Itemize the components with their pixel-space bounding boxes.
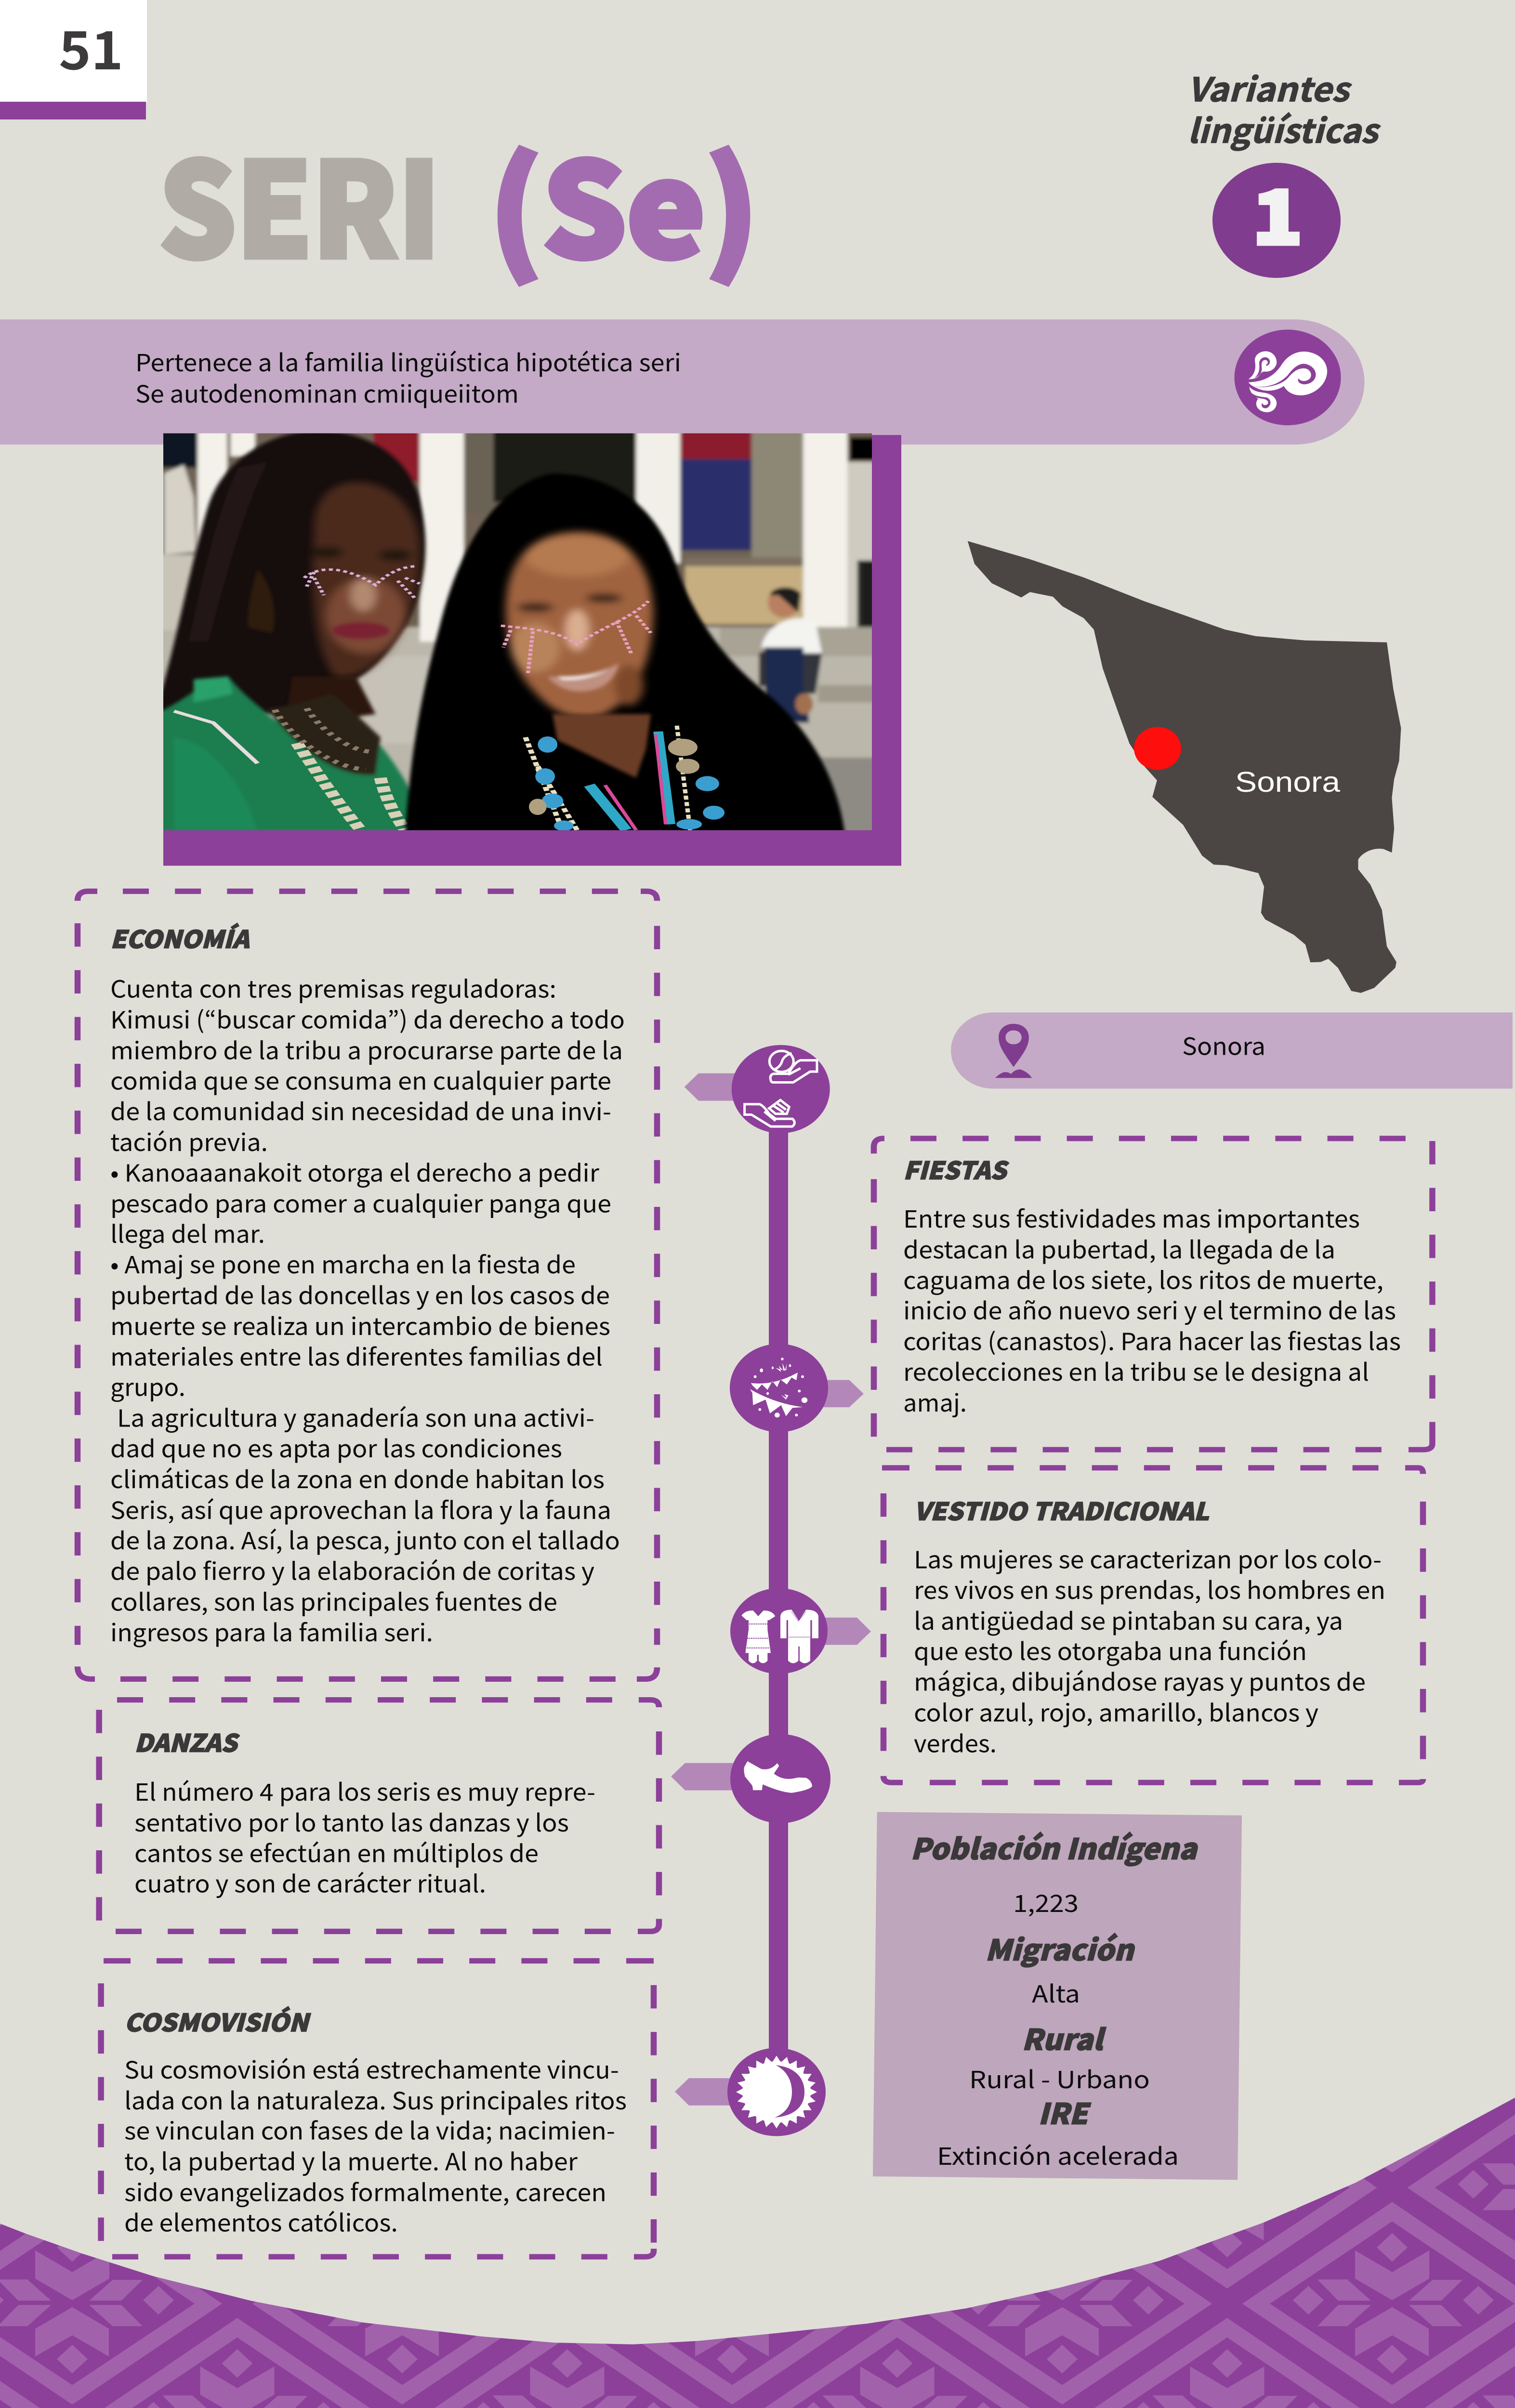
text: economía: tación previa.	[110, 1124, 268, 1158]
panel: vestido tradicional	[882, 1468, 1423, 1782]
text: cosmovisión: to, la pubertad y la muerte. Al no haber	[124, 2143, 578, 2178]
heading: fiestas: FIESTAS	[903, 1152, 1009, 1186]
language family band	[0, 319, 1365, 445]
stat: población indígena: 1,223	[1013, 1885, 1079, 1919]
text: economía: llega del mar.	[110, 1216, 265, 1250]
heading: economía: ECONOMÍA	[110, 920, 250, 955]
map marker	[1134, 727, 1181, 770]
language family band: Pertenece a la familia lingüística hipotética seri	[135, 344, 681, 379]
text: danzas: cantos se efectúan en múltiplos de	[134, 1835, 539, 1870]
stat: ire: IRE	[1038, 2091, 1091, 2133]
text: fiestas: recolecciones en la tribu se le designa al	[903, 1353, 1369, 1388]
stat: población indígena	[910, 1826, 1199, 1919]
icon: dance shoe	[730, 1734, 830, 1823]
icon: sun and moon	[727, 2044, 830, 2136]
text: economía: Cuenta con tres premisas reguladoras:	[110, 970, 556, 1005]
text: economía: de la comunidad sin necesidad de una invi-	[110, 1093, 611, 1127]
stat: rural: Rural - Urbano	[969, 2061, 1150, 2095]
text: fiestas: coritas (canastos). Para hacer las fiestas las	[903, 1323, 1401, 1357]
variantes lingüísticas heading: lingüísticas	[1187, 105, 1381, 152]
text: cosmovisión: de elementos católicos.	[124, 2204, 398, 2238]
text: fiestas: caguama de los siete, los ritos de muerte,	[903, 1262, 1383, 1296]
stat: población indígena: Población Indígena	[910, 1826, 1199, 1868]
icon: festive bunting	[730, 1344, 828, 1432]
text: economía: • Amaj se pone en marcha en la fiesta de	[110, 1246, 576, 1281]
text: cosmovisión: lada con la naturaleza. Sus principales ritos	[124, 2082, 627, 2117]
variantes count circle	[1212, 158, 1341, 278]
text: economía: pescado para comer a cualquier panga que	[110, 1185, 611, 1220]
stat: ire	[937, 2091, 1179, 2172]
text: cosmovisión	[124, 2051, 627, 2238]
photo frame	[163, 435, 901, 866]
map: Sonora	[968, 541, 1401, 993]
text: economía: pubertad de las doncellas y en los casos de	[110, 1277, 610, 1311]
panel: statistics	[873, 1812, 1242, 2180]
text: cosmovisión: sido evangelizados formalmente, carecen	[124, 2174, 606, 2209]
text: fiestas: amaj.	[903, 1384, 967, 1419]
text: danzas: cuatro y son de carácter ritual.	[134, 1865, 486, 1900]
variantes count circle: 1	[1252, 158, 1303, 266]
text: economía: miembro de la tribu a procurarse parte de la	[110, 1032, 623, 1066]
stat: ire: Extinción acelerada	[937, 2137, 1179, 2172]
panel: danzas	[99, 1700, 659, 1931]
arrow: economía	[685, 1073, 742, 1101]
title: SERI	[159, 107, 440, 295]
map: Sonora: Sonora	[1235, 766, 1340, 798]
text: vestido tradicional: color azul, rojo, amarillo, blancos y	[914, 1694, 1318, 1729]
text: economía	[110, 970, 625, 1649]
icon: wind swirl	[1234, 329, 1341, 425]
arrow: cosmovisión	[675, 2078, 737, 2106]
text: vestido tradicional: res vivos en sus prendas, los hombres en	[914, 1571, 1385, 1606]
text: vestido tradicional: la antigüedad se pintaban su cara, ya	[914, 1602, 1343, 1637]
page number tab: 51	[59, 8, 123, 85]
stat: rural: Rural	[1022, 2017, 1107, 2059]
panel: fiestas	[874, 1139, 1432, 1450]
icon: traditional clothing	[730, 1588, 828, 1674]
text: economía: de la zona. Así, la pesca, junto con el tallado	[110, 1522, 620, 1557]
stat: rural	[969, 2017, 1150, 2095]
language family band: Se autodenominan cmiiqueiitom	[135, 375, 519, 410]
timeline spine	[769, 1089, 788, 2092]
text: danzas	[134, 1773, 595, 1900]
text: economía: La agricultura y ganadería son una activi-	[117, 1400, 594, 1434]
text: economía: de palo fierro y la elaboración de coritas y	[110, 1553, 594, 1587]
location bar: Sonora	[1182, 1028, 1265, 1062]
arrow: fiestas	[814, 1380, 864, 1407]
text: vestido tradicional: Las mujeres se caracterizan por los colo-	[914, 1541, 1382, 1575]
icon: location pin	[995, 1024, 1032, 1078]
variantes lingüísticas heading	[1187, 63, 1381, 152]
text: fiestas: inicio de año nuevo seri y el termino de las	[903, 1292, 1396, 1327]
heading: cosmovisión: COSMOVISIÓN	[124, 2003, 311, 2039]
text: vestido tradicional: verdes.	[914, 1725, 997, 1759]
photo: two Seri women with face paint	[154, 427, 882, 836]
text: economía: collares, son las principales fuentes de	[110, 1584, 557, 1618]
panel: economía	[78, 891, 657, 1679]
text: vestido tradicional: que esto les otorgaba una función	[914, 1633, 1307, 1667]
text: economía: grupo.	[110, 1369, 185, 1403]
text: vestido tradicional: mágica, dibujándose rayas y puntos de	[914, 1663, 1366, 1698]
text: economía: Kimusi (“buscar comida”) da derecho a todo	[110, 1001, 625, 1036]
stat: migración: Migración	[985, 1928, 1135, 1969]
text: economía: ingresos para la familia seri.	[110, 1614, 433, 1649]
icon: hands and bean	[732, 1045, 830, 1133]
text: economía: Seris, así que aprovechan la flora y la fauna	[110, 1492, 611, 1526]
variantes lingüísticas heading: Variantes	[1187, 63, 1352, 111]
title: (Se)	[489, 107, 758, 295]
text: cosmovisión: se vinculan con fases de la vida; nacimien-	[124, 2112, 615, 2147]
text: danzas: El número 4 para los seris es muy repre-	[134, 1773, 595, 1808]
panel: cosmovisión	[101, 1961, 654, 2257]
arrow: danzas	[671, 1763, 737, 1790]
text: cosmovisión: Su cosmovisión está estrechamente vincu-	[124, 2051, 619, 2086]
text: fiestas: Entre sus festividades mas importantes	[903, 1200, 1360, 1235]
stat: migración: Alta	[1032, 1975, 1080, 2010]
text: economía: climáticas de la zona en donde habitan los	[110, 1461, 605, 1495]
heading: danzas: DANZAS	[134, 1724, 240, 1759]
title	[159, 107, 758, 295]
text: fiestas: destacan la pubertad, la llegada de la	[903, 1231, 1335, 1266]
text: fiestas	[903, 1200, 1401, 1419]
text: danzas: sentativo por lo tanto las danzas y los	[134, 1804, 569, 1839]
arrow: vestido	[819, 1618, 871, 1645]
stat: migración	[985, 1928, 1135, 2010]
text: vestido tradicional	[914, 1541, 1385, 1759]
text: economía: • Kanoaaanakoit otorga el derecho a pedir	[110, 1154, 600, 1189]
location bar	[951, 1012, 1513, 1088]
text: economía: muerte se realiza un intercambio de bienes	[110, 1308, 610, 1342]
text: economía: dad que no es apta por las condiciones	[110, 1430, 562, 1465]
bottom woven pattern band	[0, 2073, 1515, 2408]
text: economía: comida que se consuma en cualquier parte	[110, 1062, 611, 1097]
page number tab	[0, 0, 147, 119]
text: economía: materiales entre las diferentes familias del	[110, 1338, 603, 1373]
heading: vestido tradicional: VESTIDO TRADICIONAL	[914, 1492, 1209, 1528]
